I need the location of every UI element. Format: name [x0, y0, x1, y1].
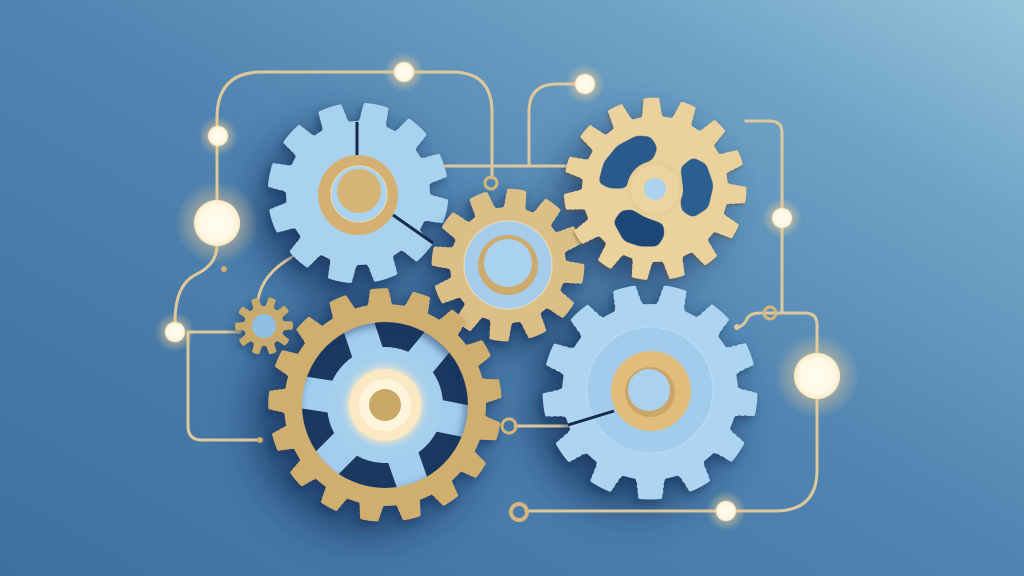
hub — [611, 351, 691, 431]
glowing light: right upper — [762, 198, 802, 238]
spokes and center — [294, 318, 475, 491]
gear: bottom right blue — [545, 287, 755, 497]
crack lines — [357, 122, 433, 243]
gear: large gold ring — [256, 276, 514, 534]
hub — [318, 155, 398, 235]
gold ring — [256, 276, 514, 534]
glowing light: left large — [175, 181, 259, 265]
glowing light: right large — [775, 334, 859, 418]
gear: center gold — [426, 183, 590, 347]
circuit lines — [175, 72, 817, 511]
gear: top right gold with holes — [560, 94, 750, 284]
glowing light: bottom — [706, 491, 746, 531]
crack line — [568, 411, 614, 425]
glowing light: left lower — [155, 312, 195, 352]
small gear center — [252, 314, 276, 338]
circuit nodes — [221, 177, 776, 520]
hub — [627, 161, 683, 217]
holes — [600, 137, 712, 245]
glowing light: left upper — [198, 116, 238, 156]
gear: small gold — [238, 300, 290, 352]
inner disc — [587, 327, 713, 453]
gear cluster shadow — [252, 126, 732, 534]
gear: top left blue — [254, 89, 462, 297]
glowing light: top right — [565, 64, 605, 104]
center hub — [464, 221, 552, 309]
glowing light: top — [384, 52, 424, 92]
